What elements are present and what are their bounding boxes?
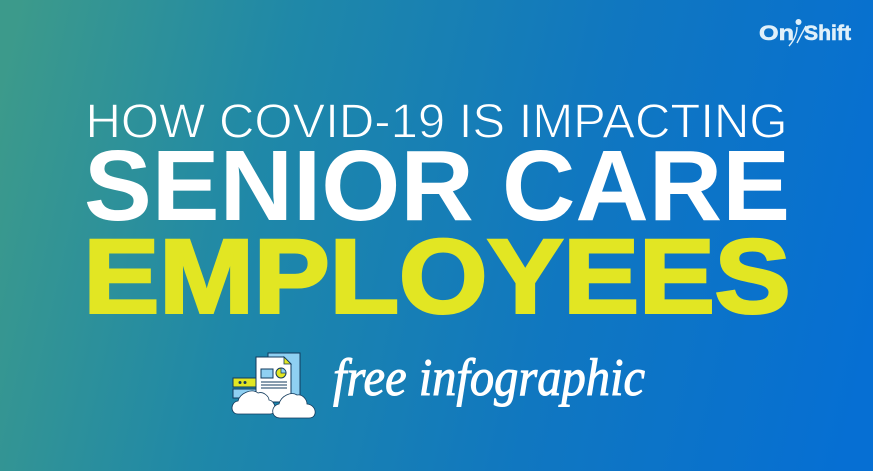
title line 1: HOW COVID-19 IS IMPACTING	[86, 96, 787, 148]
title line 3: EMPLOYEES	[84, 218, 790, 336]
right cloud	[273, 394, 315, 418]
front document	[256, 357, 291, 402]
server bars	[233, 378, 260, 387]
logo: OnShift: On	[759, 22, 794, 45]
logo: OnShift	[759, 19, 851, 46]
back document	[268, 353, 300, 398]
logo: OnShift: Shift	[804, 22, 851, 45]
subtitle script text: free infographic	[333, 349, 645, 407]
title line 2: SENIOR CARE	[84, 130, 790, 242]
icon: documents and clouds	[232, 353, 315, 418]
left cloud	[232, 391, 275, 414]
